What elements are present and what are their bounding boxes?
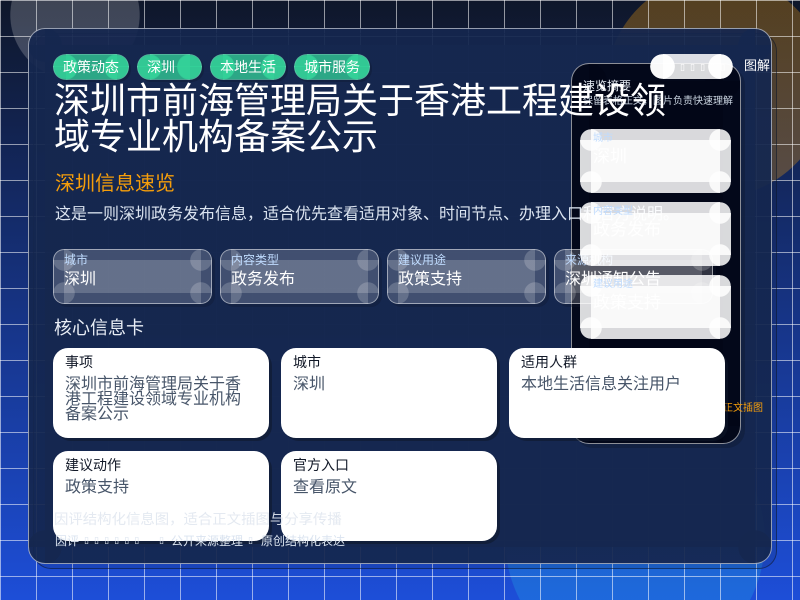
badge text [680, 58, 770, 73]
side card: city: 城市 [593, 133, 613, 144]
info card: official entry: 查看原文 [293, 479, 357, 496]
stat card: suggested use: 政策支持 [398, 271, 462, 288]
info card: item: 事项 [65, 354, 93, 370]
badge text: ▯▯▯▯▯ [680, 63, 730, 73]
footer source line: 原创结构化表达 [261, 534, 345, 548]
background circle: amber top-right [606, 0, 800, 198]
info card: city: 深圳 [293, 376, 325, 393]
description: 这是一则深圳政务发布信息，适合优先查看适用对象、时间节点、办理入口和官方说明。 [55, 206, 679, 223]
tag: 城市服务: 城市服务 [304, 59, 360, 75]
subtitle: 深圳信息速览 [55, 173, 175, 195]
footer source line: 公开来源整理 [171, 534, 243, 548]
stat card: source: 深圳通知公告 [565, 271, 661, 288]
tag: 城市服务 [294, 54, 370, 80]
stat card: city: 深圳 [64, 271, 96, 288]
stat card: content type: 内容类型 [231, 253, 279, 267]
side panel footer note: 适合正文插图 [703, 403, 763, 414]
side panel heading: 速览摘要 [583, 79, 631, 93]
side card: suggested use: 政策支持 [593, 293, 661, 312]
info card: item [53, 348, 268, 438]
info card: official entry [281, 451, 496, 540]
stat card: content type [220, 249, 379, 304]
footer source line [55, 534, 345, 548]
side card: suggested use [580, 275, 731, 339]
footer caption: 因评结构化信息图，适合正文插图与分享传播 [54, 512, 342, 528]
tag: 深圳: 深圳 [147, 59, 175, 75]
stat card: suggested use [387, 249, 546, 304]
footer source line: ▯ [248, 536, 258, 546]
footer source line: 因评 [55, 534, 79, 548]
background circle: cyan bottom-right [505, 410, 765, 600]
stat card: city [53, 249, 212, 304]
side panel: quick summary [571, 63, 741, 444]
tag: 本地生活 [210, 54, 286, 80]
info card: action: 政策支持 [65, 479, 129, 496]
stat card: content type: 政务发布 [231, 271, 295, 288]
side card: content type: 政务发布 [593, 220, 661, 239]
stat card: suggested use: 建议用途 [398, 253, 446, 267]
tag: 政策动态: 政策动态 [63, 59, 119, 75]
footer source line: ▯ [159, 536, 169, 546]
background circle: white top-left [10, 0, 140, 80]
info card: audience [509, 348, 724, 438]
info card: action [53, 451, 268, 540]
stat card: city: 城市 [64, 253, 88, 267]
text: 图解 [744, 58, 770, 73]
info card: official entry: 官方入口 [293, 457, 349, 473]
side card: city [580, 129, 731, 193]
info card: city: 城市 [293, 354, 321, 370]
info card: city [281, 348, 496, 438]
title: 深圳市前海管理局关于香港工程建设领域专业机构备案公示 [54, 80, 666, 157]
badge: illustration tag [650, 54, 733, 79]
info card: action: 建议动作 [65, 457, 121, 473]
side panel subtitle: 保留表格正文，图片负责快速理解 [583, 96, 733, 107]
info card: audience: 适用人群 [521, 354, 577, 370]
side card: suggested use: 建议用途 [593, 279, 633, 290]
footer source line: ▯▯▯▯▯▯ [84, 536, 144, 546]
side card: content type [580, 202, 731, 266]
tag: 政策动态 [53, 54, 129, 80]
stat card: source [554, 249, 713, 304]
section heading: 核心信息卡 [54, 318, 144, 338]
info card: audience: 本地生活信息关注用户 [521, 376, 681, 393]
side card: content type: 内容类型 [593, 206, 633, 217]
stat card: source: 来源机构 [565, 253, 613, 267]
side card: city: 深圳 [593, 147, 627, 166]
tag: 本地生活: 本地生活 [220, 59, 276, 75]
info card: item: 深圳市前海管理局关于香港工程建设领域专业机构备案公示 [65, 376, 241, 423]
tag: 深圳 [137, 54, 202, 80]
